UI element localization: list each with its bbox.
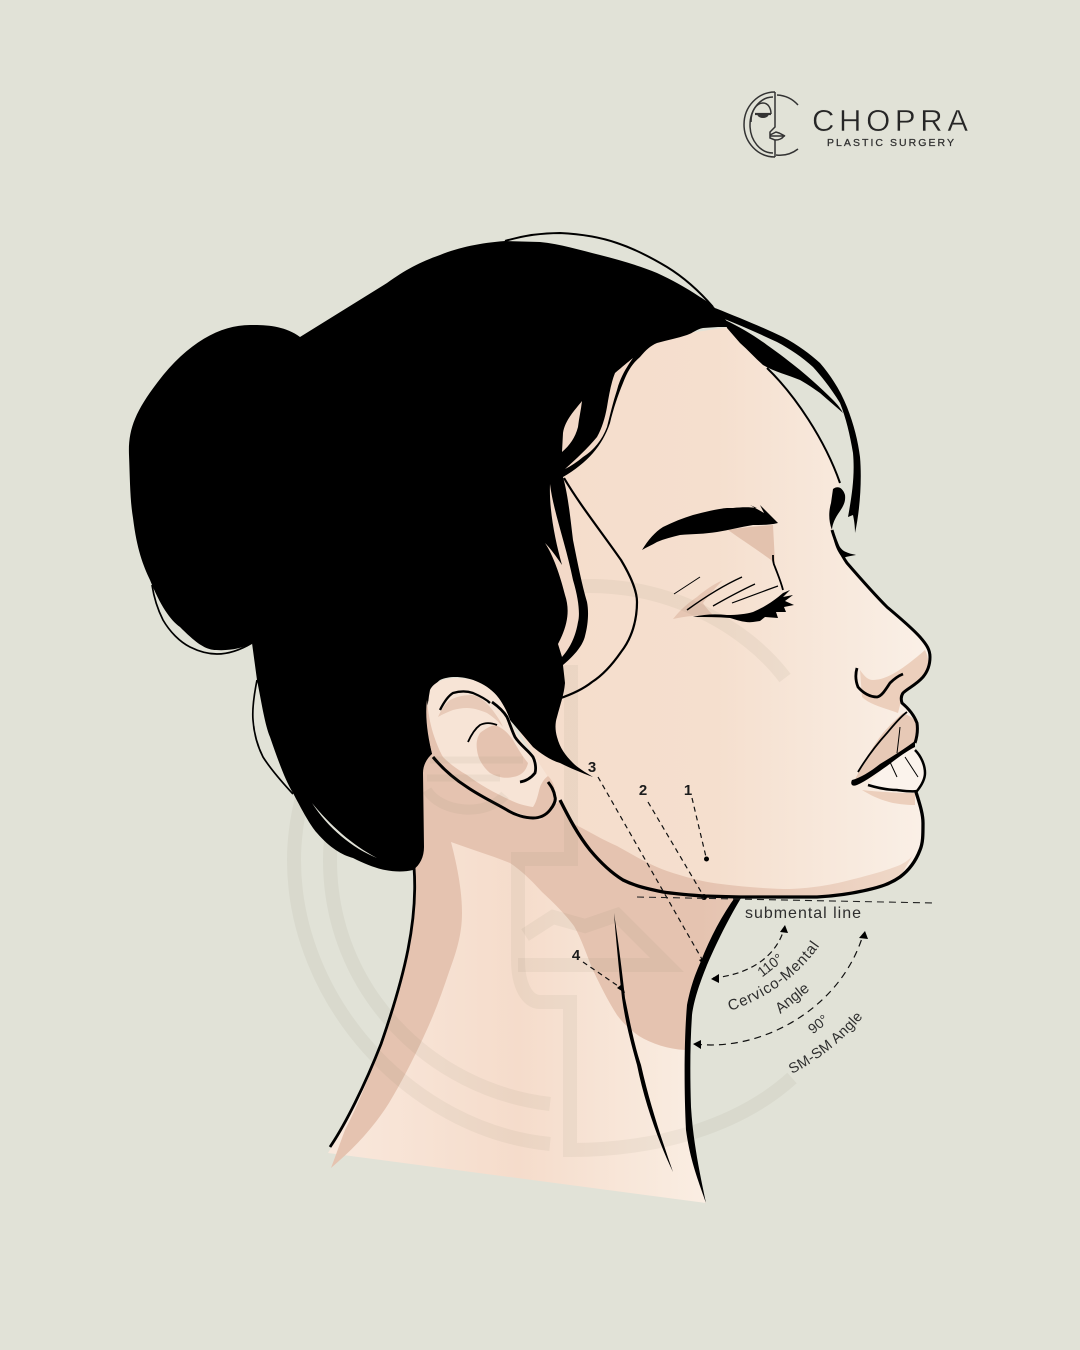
under lip shadow	[862, 790, 915, 805]
upper lip	[852, 713, 917, 785]
face side contour line	[558, 478, 637, 699]
watermark logo	[294, 586, 792, 1150]
label: Angle: Angle	[772, 980, 813, 1017]
label: 110 degrees: 110°	[754, 950, 786, 980]
nostril	[856, 668, 903, 697]
eyebrow	[642, 505, 778, 550]
hair loose strand: top	[505, 233, 713, 307]
point 1	[684, 782, 709, 862]
hair sliver: temple	[562, 401, 582, 452]
face skin	[500, 327, 930, 897]
eyelid shadow	[673, 580, 723, 619]
point 1: 1	[684, 782, 692, 799]
ear lines	[440, 692, 490, 710]
point 4: 4	[572, 947, 581, 964]
illustration: woman in profile	[129, 233, 930, 1203]
lower lip	[868, 750, 925, 792]
arc arrow: cervico-mental angle	[711, 925, 788, 983]
ear	[426, 678, 555, 818]
lower lip line	[868, 750, 925, 791]
logo tagline: PLASTIC SURGERY	[827, 137, 954, 149]
eyelid wrinkles	[674, 577, 778, 610]
nose and profile line	[832, 530, 930, 743]
front of neck line	[685, 896, 741, 1203]
label: submental line: submental line	[745, 905, 861, 922]
hair highlight	[312, 803, 377, 858]
upper lip line	[858, 712, 907, 772]
sternocleidomastoid line	[614, 913, 673, 1172]
hair: temple lock	[829, 487, 845, 530]
hair: forehead strand lower band	[725, 320, 843, 413]
back of neck line	[330, 867, 415, 1147]
eyelashes	[693, 590, 794, 622]
eyelid crease line	[773, 555, 783, 590]
mouth line	[851, 741, 915, 786]
logo: Chopra Plastic Surgery	[744, 92, 968, 157]
hair: forehead strand outer band	[715, 308, 861, 533]
point 4	[572, 947, 625, 993]
forehead line	[767, 368, 840, 483]
hair loose strand: bun	[152, 585, 252, 654]
hair	[129, 241, 732, 872]
hair sliver: hairline	[565, 358, 633, 469]
arc arrow: SM-SM angle	[693, 931, 868, 1049]
ear helix shadow	[438, 695, 503, 727]
point 2	[639, 782, 707, 900]
point 3: 3	[588, 759, 596, 776]
logo wordmark: CHOPRA	[812, 103, 968, 138]
ear rim shadow	[426, 700, 555, 818]
lip creases	[890, 727, 918, 777]
point 2: 2	[639, 782, 647, 799]
nose shadow	[860, 650, 928, 713]
hair: lock barb	[832, 530, 856, 558]
label: SM-SM Angle: SM-SM Angle	[789, 1014, 862, 1073]
ear concha shadow	[477, 725, 528, 778]
watermark eye over ear	[427, 760, 523, 810]
icon: logo face mark	[744, 92, 798, 157]
annotations	[572, 759, 932, 1073]
hair sliver: side strand	[545, 484, 579, 657]
point 3	[588, 759, 706, 968]
neck skin	[328, 760, 738, 1203]
label: 90 degrees: 90°	[805, 1011, 831, 1037]
submental dashed line	[637, 897, 933, 903]
eye socket shadow	[728, 525, 775, 563]
chin and jaw line	[560, 792, 923, 897]
label: Cervico-Mental: Cervico-Mental	[728, 940, 819, 1010]
ear base	[428, 678, 555, 818]
neck and jaw shadow	[331, 753, 913, 1168]
hair loose strand: nape	[253, 680, 293, 794]
